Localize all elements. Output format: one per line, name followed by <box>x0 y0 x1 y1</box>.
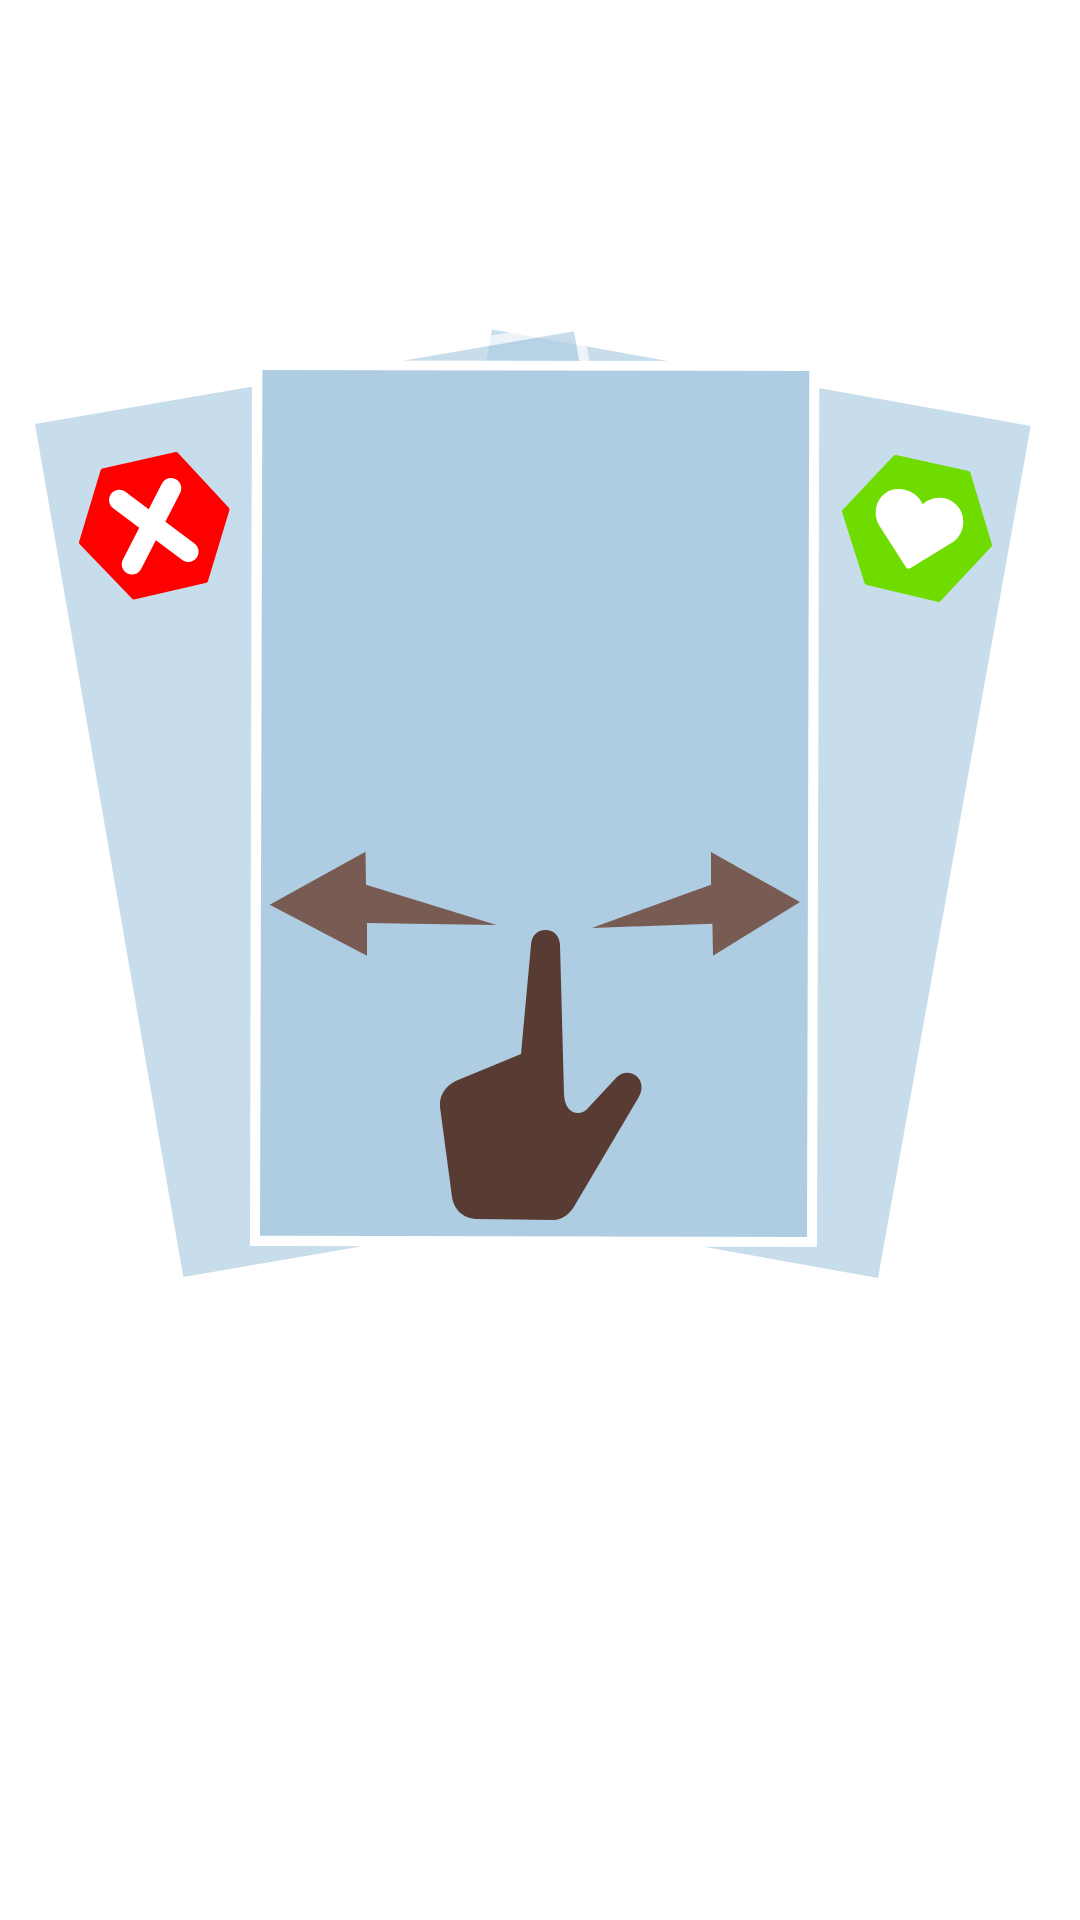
icon: green hexagon with heart <box>844 458 990 600</box>
panel: right back card <box>339 330 1031 1278</box>
panel: main front card <box>250 360 819 1247</box>
icon: pointing hand <box>440 930 642 1220</box>
arrow: left swipe <box>270 852 496 956</box>
panel: left back card <box>35 331 722 1277</box>
icon: red hexagon with cross <box>82 454 227 597</box>
arrow: right swipe <box>592 852 800 956</box>
